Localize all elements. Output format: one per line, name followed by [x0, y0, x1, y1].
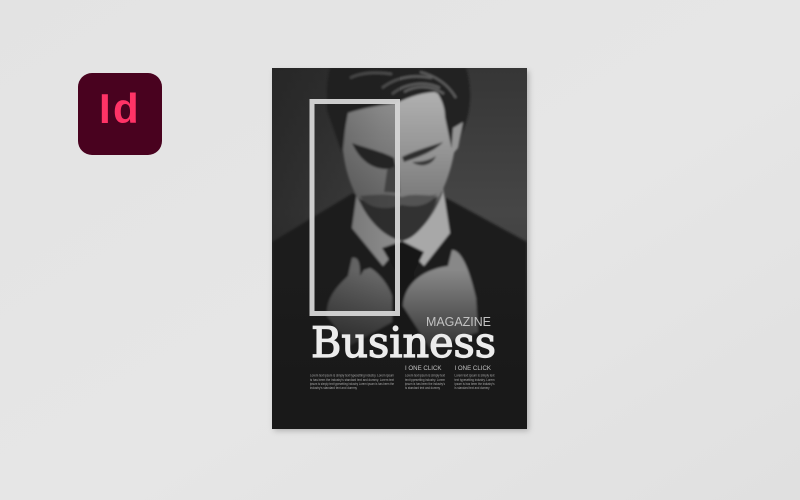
portrait of businessman [272, 68, 527, 348]
heading: MAGAZINE: MAGAZINE [426, 315, 491, 329]
beard [358, 196, 438, 241]
tie [382, 240, 425, 281]
bottom fade [272, 270, 527, 380]
face [341, 90, 455, 202]
shirt collar [352, 188, 450, 266]
column text: left: industry's standard text and dummy [310, 386, 357, 390]
right brow [402, 142, 443, 162]
magazine page shadow [274, 71, 529, 431]
icon: Adobe InDesign logo: d [113, 85, 139, 132]
column text: left [310, 374, 394, 390]
right eye [412, 156, 436, 165]
column: One Click 2 [454, 365, 495, 390]
magazine cover [272, 68, 527, 429]
icon: Adobe InDesign logo [78, 73, 162, 155]
column: One Click 1: I ONE CLICK [405, 365, 442, 372]
infographic scene [78, 68, 532, 434]
white outlined frame [312, 102, 398, 314]
right hand [403, 250, 478, 348]
column text: left: Lorem text ipsum is simply text typesetting industry. Lorem ipsum [310, 374, 394, 378]
column: One Click 2: text typesetting industry. Lorem [454, 378, 495, 382]
column: One Click 2: is standard text and dummy [454, 386, 490, 390]
left brow and eye [352, 143, 396, 169]
column: One Click 1: is standard text and dummy [405, 386, 440, 390]
icon: Adobe InDesign logo: I [99, 85, 111, 132]
column: One Click 1: text typesetting industry. Lorem [405, 378, 445, 382]
hair [327, 68, 470, 153]
nose shadow [384, 165, 400, 193]
dark overlay left of frame [272, 68, 400, 344]
suit jacket [272, 193, 527, 346]
moustache [360, 194, 437, 208]
column: One Click 2: ipsum is has been the industry's [454, 382, 495, 386]
cover photo backdrop [272, 68, 527, 360]
column: One Click 2: Lorem text ipsum is simply text [454, 374, 495, 378]
right ear [451, 122, 463, 156]
title: Business: Business [311, 318, 496, 367]
left hand [327, 258, 392, 345]
column text: left: ipsum is simply text typesetting industry Lorem ipsum is has been the [310, 382, 394, 386]
neck and beard base [422, 190, 444, 226]
column: One Click 1: ipsum is has been the industry's [405, 382, 445, 386]
column: One Click 1: Lorem text ipsum is simply text [405, 374, 445, 378]
column: One Click 2: I ONE CLICK [454, 365, 491, 372]
column: One Click 1 [405, 365, 445, 390]
hair highlights [350, 72, 456, 98]
column text: left: is has been the industry's standard text and dummy. Lorem text [310, 378, 394, 382]
